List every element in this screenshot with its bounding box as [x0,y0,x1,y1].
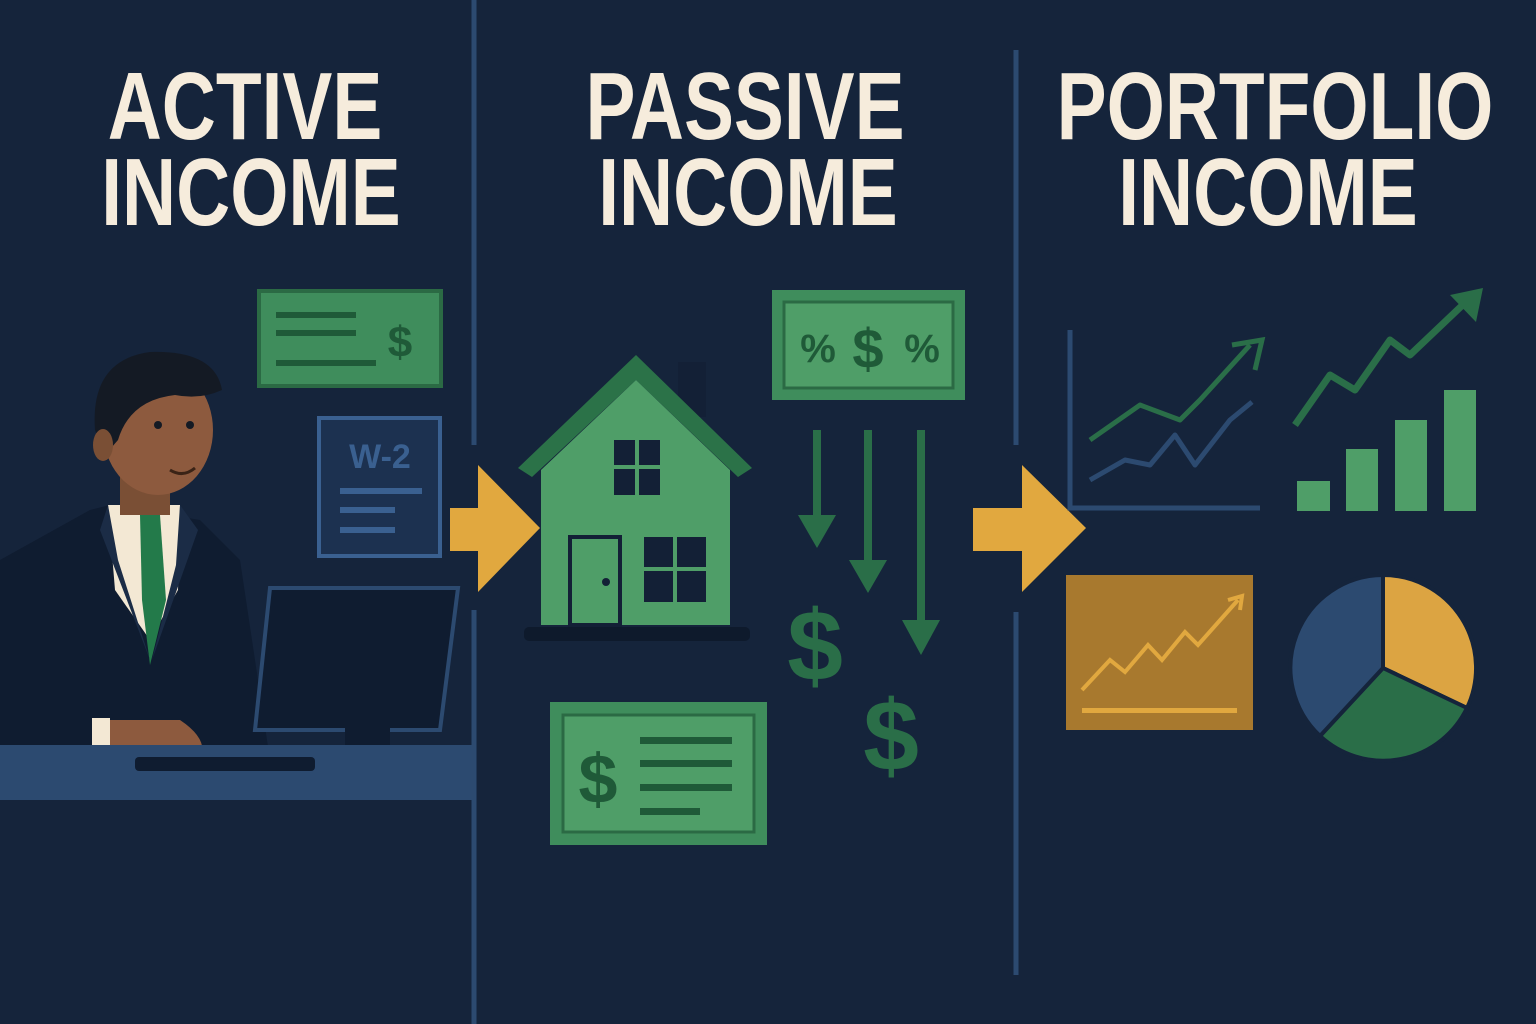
title: passive income: INCOME [598,139,898,246]
icon: down arrows with dollars [787,430,940,792]
icon: check [550,702,767,845]
icon: W-2 form: W-2 [349,438,411,476]
illustration: man at desk [0,352,270,760]
arrow: active to passive [450,465,540,592]
icon: bill with percent: % [904,327,940,371]
icon: bill with percent: $ [852,317,884,380]
icon: W-2 form [319,418,440,556]
icon: house [518,355,752,641]
icon: down arrows with dollars: $ [863,680,919,792]
illustration: monitor [255,588,458,780]
icon: bill with percent: % [800,327,836,371]
title: portfolio income [1057,53,1493,246]
title: portfolio income: PORTFOLIO [1057,53,1493,160]
chart: line chart [1070,330,1262,508]
chart: pie [1290,575,1476,761]
title: passive income: PASSIVE [585,53,905,160]
title: passive income [585,53,905,246]
icon: paycheck: $ [388,318,412,367]
icon: check: $ [579,740,617,818]
title: active income [101,53,401,246]
icon: bill with percent [772,290,965,400]
title: portfolio income: INCOME [1118,139,1418,246]
title: active income: INCOME [101,139,401,246]
arrow: passive to portfolio [973,465,1086,592]
icon: paycheck [259,291,441,386]
desk [0,745,472,800]
title: active income: ACTIVE [108,53,382,160]
chart: bar chart with arrow [1295,288,1483,511]
chart: gold trend panel [1066,575,1253,730]
icon: down arrows with dollars: $ [787,590,843,702]
